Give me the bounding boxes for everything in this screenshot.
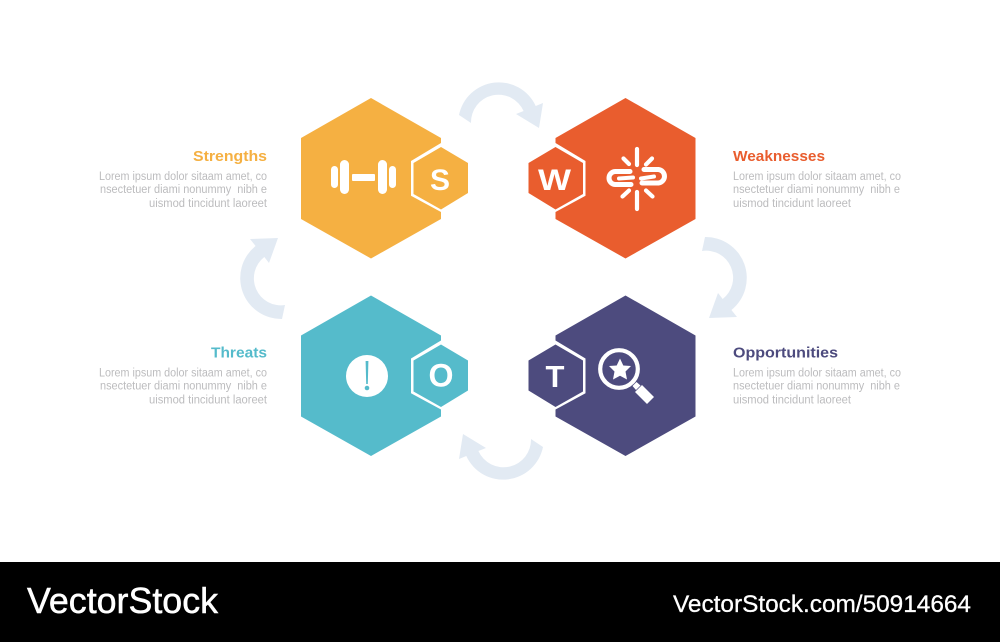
letter S: S — [430, 164, 450, 197]
heading: Opportunities: Opportunities — [733, 346, 838, 362]
panel: threats hexagon — [301, 296, 468, 456]
heading: Strengths: Strengths — [193, 149, 267, 165]
letter O: O — [428, 358, 454, 394]
icon: magnifier with star — [600, 350, 654, 404]
icon: broken chain link — [609, 149, 664, 209]
arrow: opportunities to threats — [459, 434, 543, 480]
body: Weaknesses: nsectetuer diami nonummy nibh e — [733, 184, 900, 196]
small hexagon — [414, 344, 468, 407]
body: Threats: nsectetuer diami nonummy nibh e — [100, 380, 267, 392]
large hexagon — [556, 296, 696, 456]
body: Opportunities: nsectetuer diami nonummy nibh e — [733, 380, 900, 392]
letter W: W — [538, 164, 572, 197]
text block: threats — [99, 346, 268, 406]
body: Strengths — [99, 171, 268, 210]
arrow: threats to strengths — [240, 238, 285, 319]
body: Weaknesses — [733, 171, 901, 210]
body: Strengths: uismod tincidunt laoreet — [149, 198, 268, 210]
small hexagon — [414, 147, 468, 210]
body: Threats — [99, 368, 268, 406]
icon: exclamation circle — [346, 355, 388, 397]
panel: strengths hexagon — [301, 98, 468, 258]
text block: strengths — [99, 149, 268, 210]
small hexagon — [528, 344, 583, 407]
heading: Threats: Threats — [211, 346, 267, 362]
panel: weaknesses hexagon — [528, 98, 696, 258]
footer bar — [0, 562, 1000, 642]
body: Threats: uismod tincidunt laoreet — [149, 394, 268, 406]
panel: opportunities hexagon — [528, 296, 696, 456]
arrow: strengths to weaknesses — [459, 82, 543, 128]
body: Strengths: Lorem ipsum dolor sitaam amet, co — [99, 171, 267, 183]
body: Opportunities — [733, 368, 901, 406]
footer logo text: VectorStock — [27, 580, 219, 621]
text block: opportunities — [733, 346, 901, 406]
large hexagon — [301, 98, 441, 258]
large hexagon — [556, 98, 696, 258]
body: Threats: Lorem ipsum dolor sitaam amet, co — [99, 368, 267, 380]
icon: dumbbell — [331, 160, 396, 194]
footer url: VectorStock.com/50914664 — [673, 591, 971, 618]
body: Opportunities: Lorem ipsum dolor sitaam amet, co — [733, 368, 901, 380]
body: Weaknesses: uismod tincidunt laoreet — [733, 198, 852, 210]
letter T: T — [546, 359, 565, 394]
small hexagon — [528, 147, 583, 210]
large hexagon — [301, 296, 441, 456]
text block: weaknesses — [733, 149, 901, 210]
body: Opportunities: uismod tincidunt laoreet — [733, 394, 852, 406]
body: Weaknesses: Lorem ipsum dolor sitaam amet, co — [733, 171, 901, 183]
heading: Weaknesses: Weaknesses — [733, 149, 825, 165]
arrow: weaknesses to opportunities — [702, 237, 747, 318]
body: Strengths: nsectetuer diami nonummy nibh e — [100, 184, 267, 196]
